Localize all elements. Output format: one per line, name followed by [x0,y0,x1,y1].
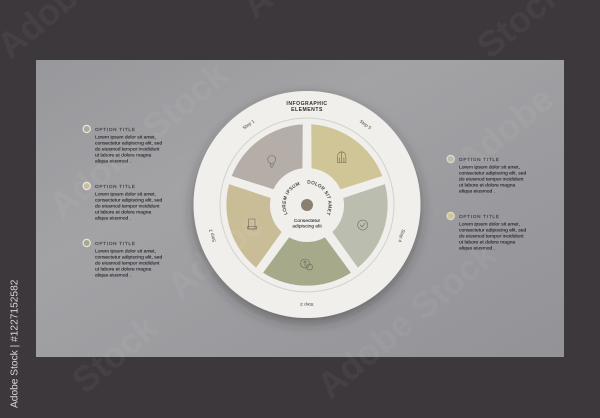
option text: Lorem ipsum dolor sit amet, [95,248,156,254]
option text: aliqua eiusmod . [95,272,131,278]
wedge: step 2 [217,173,290,272]
option text: consectetur adipiscing elit, sed [95,140,162,146]
option title: OPTION TITLE [95,241,136,246]
watermarks: Adobe Stock [41,53,236,226]
label: step 2: Step 2 [208,228,217,243]
option title: OPTION TITLE [459,157,500,162]
option text: ut labore et dolore magna [459,182,516,188]
option text [95,192,162,222]
option text: aliqua eiusmod . [95,216,131,222]
option title: OPTION TITLE [95,127,136,132]
option text: consectetur adipiscing elit, sed [95,198,162,204]
option text: do eiusmod tempor incididunt [95,146,160,152]
option text [95,134,162,164]
panel: gray card [36,60,564,357]
bullet [446,155,455,163]
bullet [446,212,455,220]
label: step 3: Step 3 [300,302,314,307]
option text [95,248,162,278]
option text: do eiusmod tempor incididunt [95,204,160,210]
option text: ut labore et dolore magna [95,210,152,216]
option text [459,222,526,252]
option text: Lorem ipsum dolor sit amet, [95,192,156,198]
label: step 5: Step 5 [359,119,373,131]
option text: aliqua eiusmod . [95,158,131,164]
outer white disc [194,91,420,318]
center heading: INFOGRAPHIC [286,101,328,107]
option text: consectetur adipiscing elit, sed [95,254,162,260]
hub caption [292,218,322,230]
option title: OPTION TITLE [95,184,136,189]
option text: ut labore et dolore magna [459,240,516,246]
center hub dot [301,199,313,211]
option 4 [446,155,526,194]
icon: light bulb [268,156,276,168]
watermarks: Adobe [449,78,561,181]
bullet [82,182,91,190]
label: step 1: Step 1 [242,118,256,130]
curved hub text: right: DOLOR SIT AMET [307,180,332,216]
option 2 [82,182,162,222]
center heading: ELEMENTS [291,107,323,113]
icon: arch door [338,152,346,162]
inner ring [220,118,394,292]
option 3 [82,239,162,278]
icon: clock check [358,220,368,230]
option text: ut labore et dolore magna [95,266,152,272]
option 5 [446,212,526,252]
option text: consectetur adipiscing elit, sed [459,170,526,176]
icon: arrows in circles [300,259,312,270]
option text: consectetur adipiscing elit, sed [459,228,526,234]
option text: Lorem ipsum dolor sit amet, [459,164,520,170]
option text: aliqua eiusmod . [459,188,495,194]
watermarks: Adobe Stock [309,233,504,406]
option text: do eiusmod tempor incididunt [459,176,524,182]
wedge: step 5 [291,114,390,205]
stock id side text: Adobe Stock | #1227152582 [10,279,20,408]
option title: OPTION TITLE [459,214,500,219]
option text: do eiusmod tempor incididunt [95,260,160,266]
option text [459,164,526,194]
option text: aliqua eiusmod . [459,246,495,252]
label: step 4: Step 4 [397,229,406,243]
watermarks: Adobe [159,203,271,306]
wedge: step 4 [324,173,397,272]
curved hub text: left: LOREM IPSUM [282,182,300,215]
option text: Lorem ipsum dolor sit amet, [459,222,520,228]
center heading [286,101,328,113]
icon: mobile device [248,219,256,229]
option 1 [82,125,162,164]
donut wheel [186,89,428,330]
option text: do eiusmod tempor incididunt [459,234,524,240]
watermarks: Stock [64,306,166,401]
bullet [82,239,91,247]
option text: ut labore et dolore magna [95,152,152,158]
bullet [82,125,91,133]
hub caption: adipiscing elit [292,224,322,230]
wedge: step 3 [263,237,351,286]
option text: Lorem ipsum dolor sit amet, [95,134,156,140]
hub caption: Consectetur [294,218,321,224]
wedge: step 1 [224,114,323,205]
